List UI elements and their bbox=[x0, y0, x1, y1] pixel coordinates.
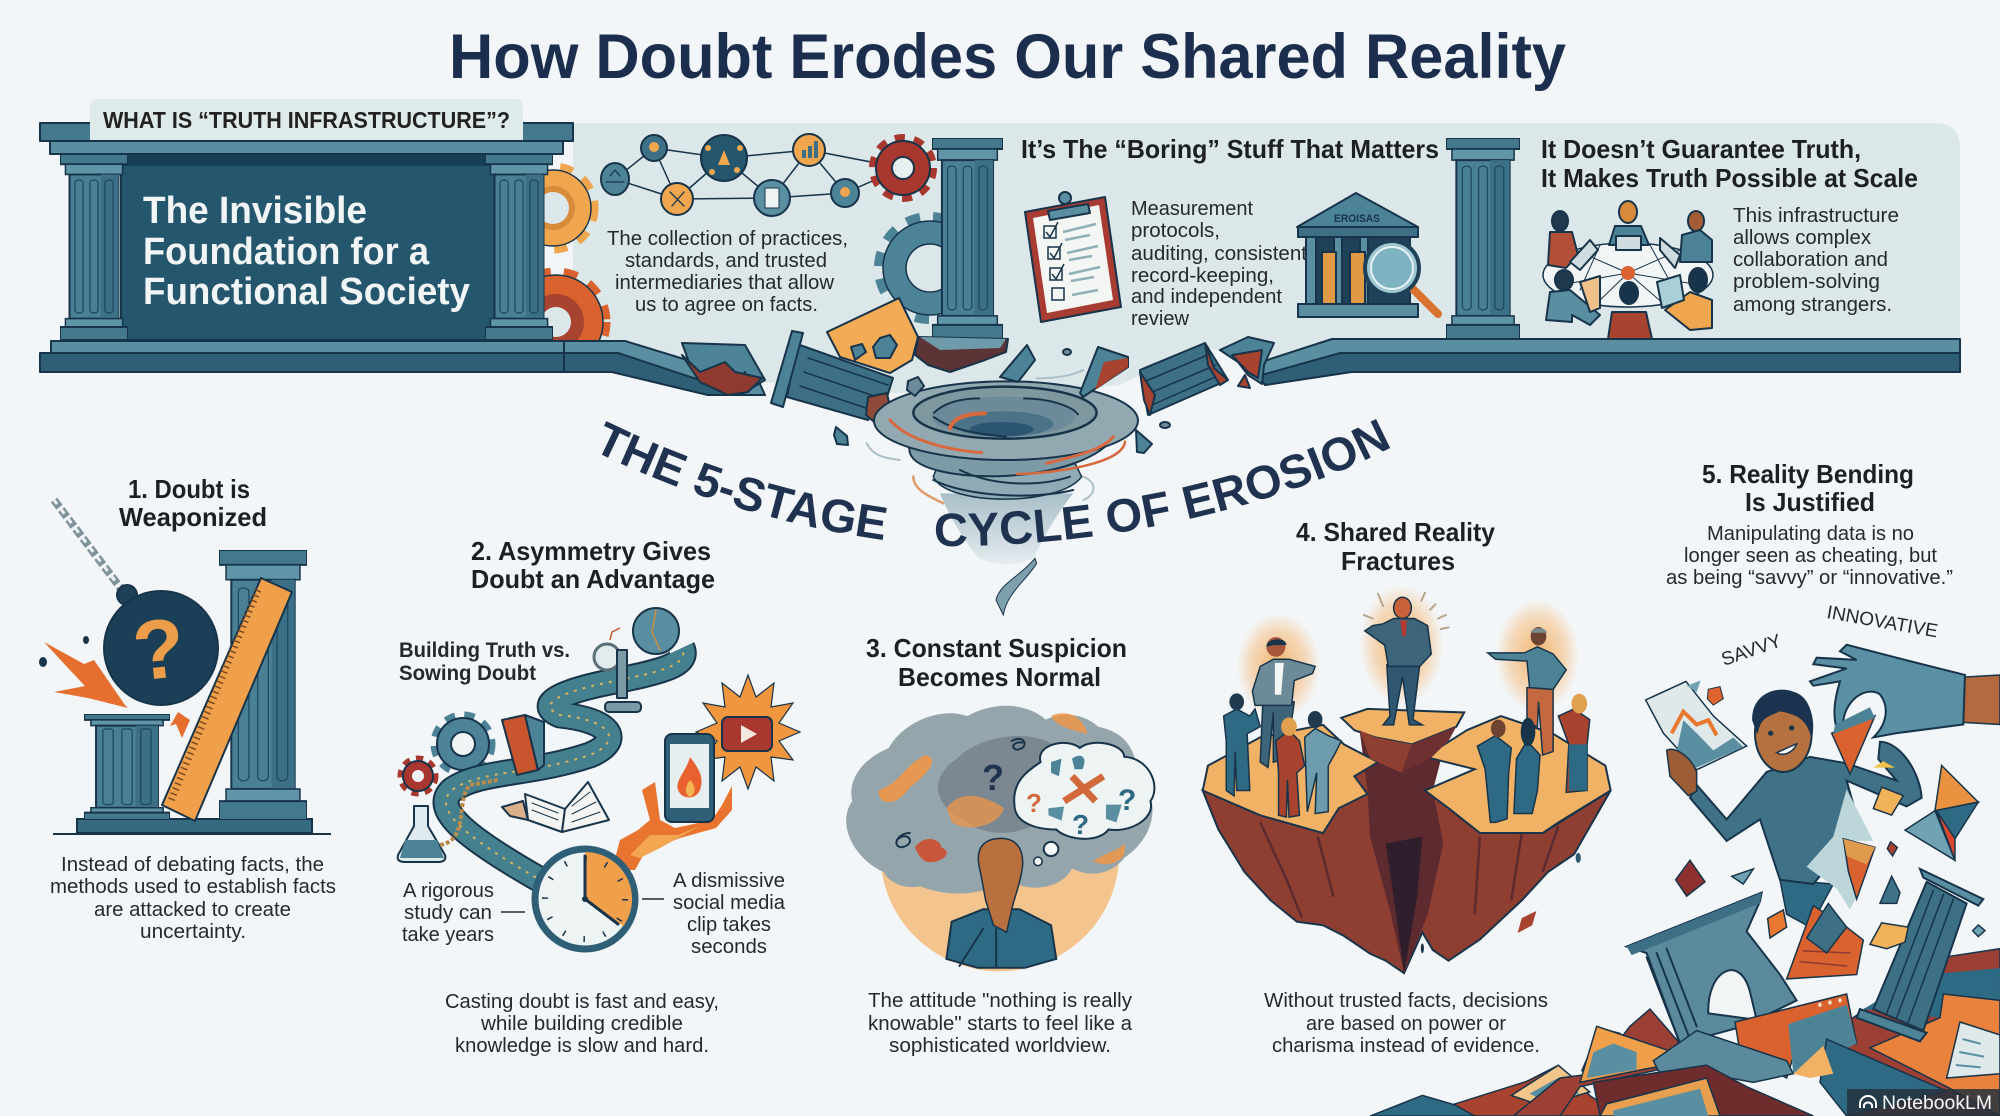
stage 5 illustration: rubble pile, left part bbox=[1370, 1028, 1620, 1116]
stage 5 text: as being “savvy” or “innovative.” bbox=[1666, 566, 1953, 589]
stage 3 heading: Becomes Normal bbox=[898, 662, 1101, 692]
icon: institution under magnifying glass: EROISAS bbox=[1334, 213, 1380, 225]
stage 2 label: Building Truth vs. bbox=[399, 639, 570, 662]
text: boring stuff list: and independent bbox=[1131, 285, 1282, 308]
stage 3 heading: 3. Constant Suspicion bbox=[866, 633, 1127, 663]
stage 2 callout: dismissive clip: A dismissive bbox=[673, 869, 785, 892]
stage 2 callout: dismissive clip bbox=[642, 869, 786, 958]
stage 2 illustration: fast viral clip bbox=[612, 675, 800, 870]
stage 5 heading bbox=[1702, 459, 1914, 517]
text: definition of truth infrastructure: intermediaries that allow bbox=[615, 271, 834, 294]
text: boring stuff list: protocols, bbox=[1131, 219, 1220, 242]
text: infrastructure at scale: collaboration and bbox=[1733, 248, 1888, 271]
text: infrastructure at scale: This infrastructure bbox=[1733, 204, 1899, 227]
question marks in cloud: ? bbox=[982, 757, 1004, 798]
heading: makes truth possible at scale: It Doesn’t Guarantee Truth, bbox=[1541, 134, 1861, 164]
icon: strangers collaborating around a table bbox=[1543, 201, 1713, 339]
stage 3 illustration: person in cloud of suspicion bbox=[846, 706, 1154, 971]
text: boring stuff list: review bbox=[1131, 307, 1189, 330]
stage 4 text: are based on power or bbox=[1306, 1012, 1506, 1035]
stage 2 callout: rigorous study: A rigorous bbox=[403, 879, 494, 902]
text: definition of truth infrastructure: us to agree on facts. bbox=[635, 293, 818, 316]
figure: right pointing speaker bbox=[1488, 627, 1566, 755]
stage 4 illustration: fractured floating island bbox=[1203, 585, 1611, 973]
icon: fallen column left bbox=[771, 331, 893, 421]
stage 4 text: Without trusted facts, decisions bbox=[1264, 989, 1548, 1012]
figure: left speaker bbox=[1252, 637, 1315, 767]
figure: central speaker bbox=[1365, 597, 1431, 725]
text: infrastructure at scale: problem-solving bbox=[1733, 270, 1880, 293]
text: definition of truth infrastructure: The collection of practices, bbox=[607, 227, 848, 250]
debris around the tornado bbox=[834, 345, 1250, 453]
text: definition of truth infrastructure bbox=[607, 227, 848, 316]
question marks in cloud: ? bbox=[1072, 809, 1089, 840]
stage 1 heading bbox=[119, 474, 267, 532]
stage 1 heading: 1. Doubt is bbox=[128, 474, 250, 504]
stage 2 text: knowledge is slow and hard. bbox=[455, 1034, 709, 1057]
stage 4 text: charisma instead of evidence. bbox=[1272, 1034, 1540, 1057]
stage 1 text bbox=[50, 853, 336, 943]
badge: NotebookLM bbox=[1847, 1089, 2000, 1116]
stage 3 heading bbox=[866, 633, 1127, 692]
stage 2 text bbox=[445, 990, 719, 1057]
stage 4 text bbox=[1264, 989, 1548, 1057]
stage 2 callout: dismissive clip: clip takes bbox=[687, 913, 771, 936]
heading: the invisible foundation: Foundation for a bbox=[143, 231, 430, 273]
broken orange tablet bbox=[827, 298, 918, 373]
stage 2 illustration: long road of research bbox=[398, 608, 683, 882]
text: infrastructure at scale bbox=[1733, 204, 1899, 316]
heading: the invisible foundation: Functional Society bbox=[143, 271, 470, 313]
label: innovative: INNOVATIVE bbox=[1825, 602, 1939, 642]
stage 5 heading: 5. Reality Bending bbox=[1702, 459, 1914, 489]
figure: followers bbox=[1224, 693, 1590, 822]
stage 2 heading: 2. Asymmetry Gives bbox=[471, 536, 711, 566]
heading: makes truth possible at scale: It Makes Truth Possible at Scale bbox=[1541, 163, 1918, 193]
question marks in cloud: ? bbox=[1118, 784, 1136, 817]
stage 2 text: while building credible bbox=[480, 1012, 683, 1035]
icon: clipboard checklist bbox=[1025, 192, 1121, 322]
tab: what is truth infrastructure bbox=[90, 99, 523, 140]
stage 5 text bbox=[1666, 522, 1953, 589]
title: How Doubt Erodes Our Shared Reality bbox=[449, 22, 1566, 92]
icon: background gears bbox=[544, 163, 941, 340]
stage 1 text: uncertainty. bbox=[140, 920, 246, 943]
label: savvy: SAVVY bbox=[1719, 631, 1785, 671]
stage 2 callout: rigorous study: study can bbox=[404, 901, 492, 924]
badge: NotebookLM: NotebookLM bbox=[1882, 1093, 1992, 1114]
stage 4 heading: Fractures bbox=[1341, 546, 1455, 576]
stage 5 text: Manipulating data is no bbox=[1707, 522, 1914, 545]
panel: truth infrastructure background bbox=[573, 123, 1960, 398]
heading: makes truth possible at scale bbox=[1541, 134, 1918, 193]
stage 2 heading bbox=[471, 536, 715, 594]
heading: boring stuff: It’s The “Boring” Stuff That Matters bbox=[1021, 134, 1439, 164]
text: definition of truth infrastructure: standards, and trusted bbox=[625, 249, 827, 272]
icon: institution under magnifying glass bbox=[1297, 193, 1438, 317]
stage 5 illustration: man with reality fragments bbox=[1646, 645, 2000, 979]
stage 5 heading: Is Justified bbox=[1745, 487, 1875, 517]
text: boring stuff list bbox=[1131, 197, 1307, 330]
stage 4 heading bbox=[1296, 517, 1496, 576]
beam: collapsing right section bbox=[1220, 337, 1960, 385]
question marks in cloud: ? bbox=[1026, 788, 1042, 818]
heading: the 5-stage cycle of erosion: CYCLE OF EROSION bbox=[936, 419, 1390, 546]
stage 3 text: knowable" starts to feel like a bbox=[868, 1012, 1133, 1035]
stage 3 text bbox=[868, 989, 1133, 1057]
stage 2 illustration: clock comparing time bbox=[535, 849, 635, 949]
text: boring stuff list: auditing, consistent bbox=[1131, 242, 1307, 265]
stage 2 heading: Doubt an Advantage bbox=[471, 564, 715, 594]
question marks in cloud bbox=[982, 757, 1136, 840]
stage 3 text: sophisticated worldview. bbox=[889, 1034, 1111, 1057]
stage 1 heading: Weaponized bbox=[119, 502, 267, 532]
stage 2 callout: dismissive clip: seconds bbox=[691, 935, 767, 958]
stage 2 label bbox=[399, 639, 570, 685]
stage 1 text: are attacked to create bbox=[94, 898, 291, 921]
stage 2 callout: dismissive clip: social media bbox=[673, 891, 786, 914]
stage 2 callout: rigorous study: take years bbox=[402, 923, 494, 946]
column 3 bbox=[1446, 138, 1520, 339]
stage 1 text: methods used to establish facts bbox=[50, 875, 336, 898]
heading: the 5-stage cycle of erosion bbox=[602, 419, 1390, 546]
text: infrastructure at scale: allows complex bbox=[1733, 226, 1872, 249]
stage 1 illustration: wrecking ball hits columns bbox=[39, 500, 331, 834]
stage 5 illustration: rubble and ruined pediment bbox=[1513, 869, 2000, 1116]
text: boring stuff list: Measurement bbox=[1131, 197, 1253, 220]
beam: collapsing left section bbox=[564, 341, 765, 395]
stage 1 text: Instead of debating facts, the bbox=[61, 853, 324, 876]
heading: the invisible foundation: The Invisible bbox=[143, 190, 367, 232]
column 2: standing and broken bbox=[915, 138, 1008, 372]
icon: fallen column right bbox=[1140, 343, 1228, 415]
heading: the invisible foundation bbox=[143, 190, 470, 313]
stage 4 heading: 4. Shared Reality bbox=[1296, 517, 1496, 547]
foundation: left pediment with dark panel bbox=[40, 123, 612, 372]
stage 2 label: Sowing Doubt bbox=[399, 662, 536, 685]
stage 2 callout: rigorous study bbox=[402, 879, 525, 946]
icon: network of trusted nodes bbox=[601, 134, 933, 216]
icon: tornado of doubt bbox=[867, 370, 1138, 615]
stage 2 text: Casting doubt is fast and easy, bbox=[445, 990, 719, 1013]
tab: what is truth infrastructure: WHAT IS “TRUTH INFRASTRUCTURE”? bbox=[103, 107, 510, 133]
text: infrastructure at scale: among strangers. bbox=[1733, 293, 1892, 316]
stage 3 text: The attitude "nothing is really bbox=[868, 989, 1133, 1012]
stage 1 illustration: wrecking ball hits columns: ? bbox=[128, 600, 189, 699]
heading: the 5-stage cycle of erosion: THE 5-STAGE bbox=[602, 421, 887, 540]
text: boring stuff list: record-keeping, bbox=[1131, 264, 1274, 287]
stage 5 text: longer seen as cheating, but bbox=[1684, 544, 1937, 567]
